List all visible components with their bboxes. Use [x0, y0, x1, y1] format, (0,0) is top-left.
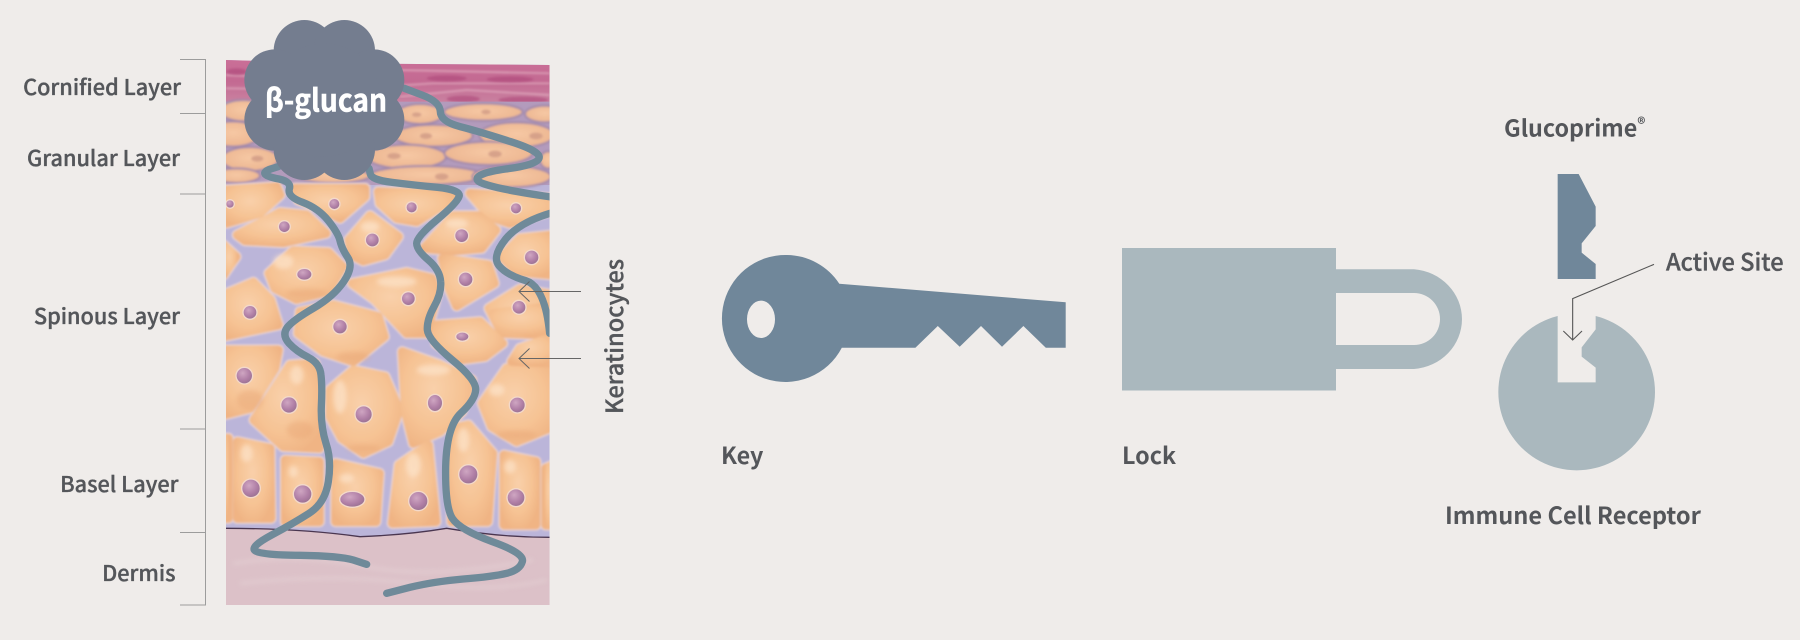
dermis — [226, 528, 550, 607]
skin cross-section illustration — [226, 60, 550, 605]
Lock label: Lock — [1122, 437, 1176, 471]
cell shadows — [237, 289, 537, 452]
beta-glucan cloud — [244, 20, 404, 180]
icon: lock — [1122, 248, 1462, 390]
icon: Glucoprime key fragment — [1558, 174, 1596, 279]
layer labels: Basel Layer — [60, 468, 179, 499]
layer labels: Granular Layer — [27, 142, 180, 173]
Glucoprime label: Glucoprime — [1504, 110, 1637, 144]
Key label: Key — [721, 437, 764, 471]
Keratinocytes label: Keratinocytes — [596, 259, 630, 414]
keratinocyte arrows — [519, 282, 581, 368]
layer labels — [23, 71, 181, 588]
icon: key — [722, 255, 1066, 382]
spinous and basal cells — [220, 187, 553, 525]
beta-glucan strands — [254, 88, 553, 593]
icon: immune cell receptor — [1498, 316, 1655, 470]
Immune Cell Receptor label: Immune Cell Receptor — [1445, 497, 1702, 531]
cell nuclei — [226, 198, 539, 511]
granular nuclei — [251, 110, 543, 180]
layer bracket — [180, 60, 206, 605]
cornified layer — [226, 60, 550, 102]
layer labels: Spinous Layer — [34, 300, 180, 331]
beta-glucan cloud: β-glucan — [265, 76, 387, 120]
cell highlights — [241, 219, 516, 483]
Active Site label: Active Site — [1666, 244, 1784, 278]
granular layer — [226, 102, 550, 185]
layer labels: Dermis — [102, 557, 176, 588]
active site arrow — [1563, 264, 1654, 340]
spinous and basal cell halos — [220, 187, 553, 525]
Glucoprime label: ® — [1637, 110, 1646, 134]
layer labels: Cornified Layer — [23, 71, 181, 102]
